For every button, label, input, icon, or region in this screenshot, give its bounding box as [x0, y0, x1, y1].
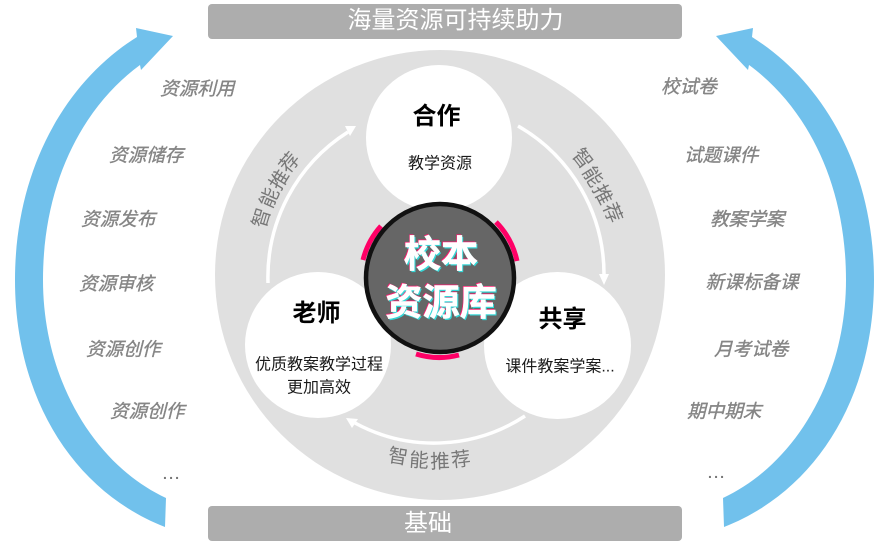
text: left smart recommendation	[249, 148, 305, 231]
text: right smart recommendation: 推	[588, 181, 616, 209]
left upward arrow	[15, 28, 173, 527]
left labels: 资源储存	[109, 144, 186, 166]
text: bottom smart recommendation: 能	[408, 449, 430, 473]
right labels	[661, 76, 801, 481]
text: bottom smart recommendation	[387, 445, 472, 473]
node: cooperation: 合作	[412, 103, 460, 130]
node: sharing	[484, 272, 631, 419]
center hub title	[385, 233, 497, 323]
pink accent arcs	[363, 222, 517, 358]
left labels: 资源利用	[160, 78, 237, 99]
arrow: right recommendation	[518, 126, 609, 285]
node: sharing: 课件教案学案...	[505, 358, 615, 376]
center hub circle	[366, 204, 514, 352]
text: right smart recommendation: 荐	[598, 200, 626, 226]
left labels: 资源创作	[110, 400, 188, 422]
bottom banner: 基础	[404, 510, 452, 537]
left labels	[79, 78, 237, 482]
text: right smart recommendation: 智	[567, 145, 597, 173]
left labels: 资源审核	[79, 273, 157, 294]
bottom banner	[208, 506, 682, 541]
right upward arrow	[716, 28, 874, 527]
central gray disc	[215, 50, 665, 500]
left labels: 资源发布	[81, 208, 158, 230]
right labels: ...	[708, 465, 726, 481]
left labels: ...	[163, 466, 181, 482]
right labels: 新课标备课	[706, 272, 801, 292]
top banner	[208, 4, 682, 39]
text: right smart recommendation: 能	[578, 163, 606, 191]
left labels: 资源创作	[86, 338, 164, 360]
right labels: 期中期末	[687, 400, 764, 422]
right labels: 试题课件	[684, 144, 760, 166]
node: cooperation: 教学资源	[408, 154, 472, 172]
arrow: bottom recommendation	[346, 416, 525, 443]
center hub title: 校本	[404, 233, 478, 275]
node: cooperation	[366, 65, 512, 211]
right labels: 月考试卷	[714, 338, 790, 360]
node: sharing: 共享	[538, 306, 586, 333]
right labels: 教案学案	[710, 208, 787, 230]
node: teacher: 老师	[292, 300, 340, 327]
text: bottom smart recommendation: 荐	[450, 448, 472, 472]
right labels: 校试卷	[661, 76, 718, 97]
arrow: left recommendation	[268, 126, 356, 283]
top banner: 海量资源可持续助力	[348, 7, 564, 34]
text: bottom smart recommendation: 推	[430, 451, 450, 473]
node: teacher	[245, 272, 391, 418]
text: right smart recommendation	[567, 145, 626, 226]
text: left smart recommendation: 能	[256, 185, 284, 211]
text: left smart recommendation: 荐	[275, 148, 305, 178]
center hub title: 资源库	[385, 281, 497, 323]
text: left smart recommendation: 智	[249, 205, 275, 231]
node: teacher: 更加高效	[287, 378, 351, 396]
node: teacher: 优质教案教学过程	[255, 356, 383, 374]
text: bottom smart recommendation: 智	[387, 445, 409, 469]
text: left smart recommendation: 推	[266, 166, 294, 194]
